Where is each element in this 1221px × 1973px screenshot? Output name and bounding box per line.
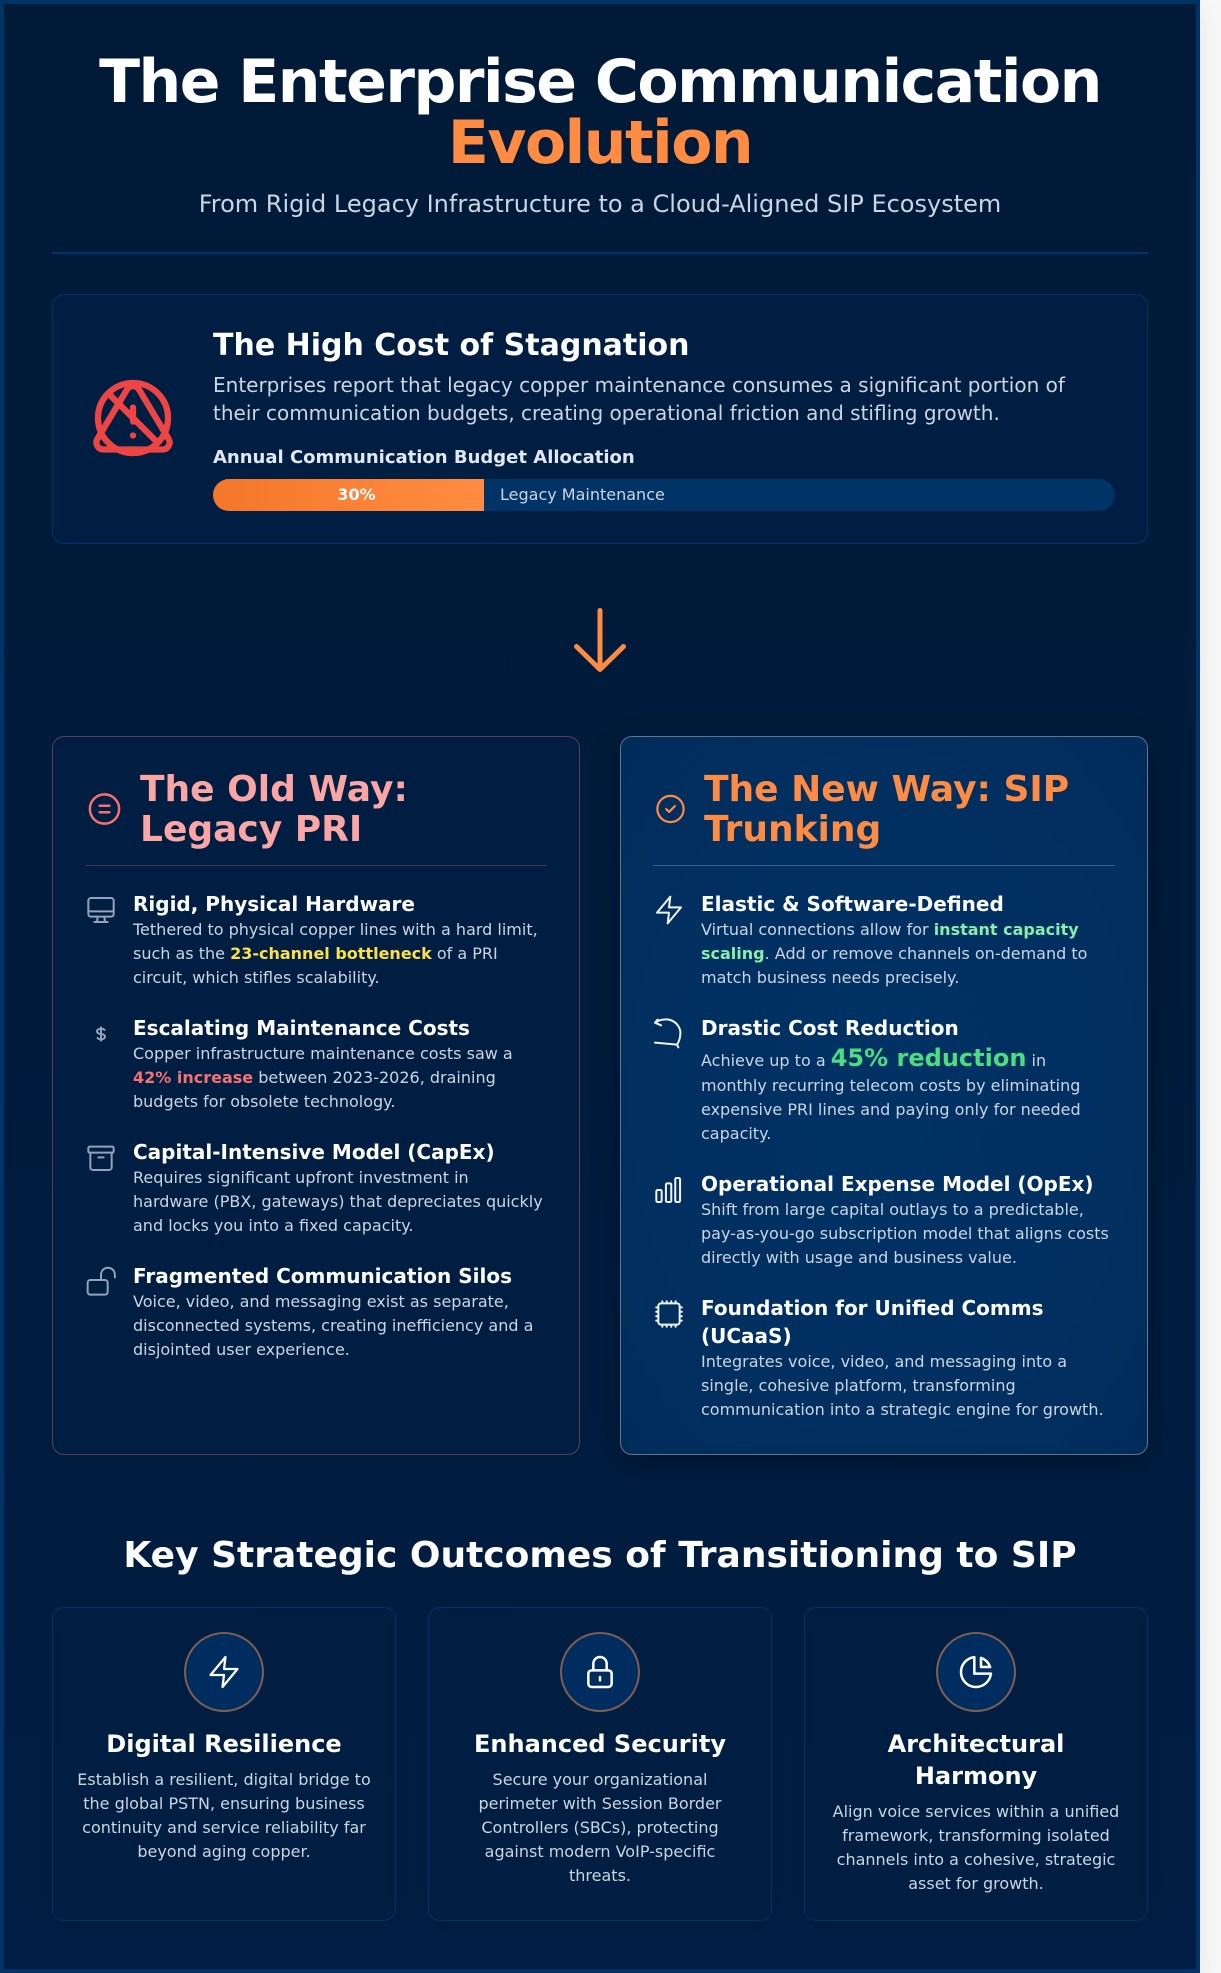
arrow: down to comparison — [574, 608, 626, 672]
icon: dollar sign — [96, 1026, 106, 1042]
item: elastic: Virtual connections allow for instant capacity scaling. Add or remove channels on-demand to match business needs precisely. — [701, 920, 1087, 987]
item: opex — [655, 1172, 1109, 1267]
item: rigid hardware — [87, 892, 538, 987]
outcome title: Digital Resilience — [106, 1730, 342, 1758]
title: Evolution — [448, 108, 752, 178]
panel heading: The New Way: SIP Trunking — [704, 769, 1069, 850]
bar segment: 30 percent: 30% — [337, 485, 376, 504]
outcome text: Align voice services within a unified framework, transforming isolated channels into a cohesive, strategic asset for growth. — [833, 1802, 1119, 1893]
item: ucaas: Integrates voice, video, and messaging into a single, cohesive platform, transforming communication into a strategic engine for growth. — [701, 1352, 1104, 1419]
outcome text: Establish a resilient, digital bridge to the global PSTN, ensuring business continuity and service reliability far beyond aging copper. — [77, 1770, 371, 1861]
item: maintenance costs — [96, 1016, 513, 1111]
icon: bar chart — [655, 1177, 682, 1203]
heading: The High Cost of Stagnation — [213, 328, 690, 363]
icon: circle with lines — [88, 793, 120, 825]
title: The Enterprise Communication — [99, 47, 1101, 117]
item: silos — [86, 1264, 533, 1359]
description: Enterprises report that legacy copper maintenance consumes a significant portion of their communication budgets, creating operational friction and stifling growth. — [213, 373, 1065, 425]
item: capex: Capital-Intensive Model (CapEx) — [133, 1140, 495, 1164]
icon: circular arrow — [654, 1018, 682, 1048]
icon: archive box — [87, 1146, 115, 1171]
item: ucaas — [655, 1296, 1104, 1419]
item: opex: Shift from large capital outlays to a predictable, pay-as-you-go subscription model that aligns costs directly with usage and business value. — [701, 1200, 1109, 1267]
outcome title: Enhanced Security — [474, 1730, 726, 1758]
icon: chip — [655, 1300, 683, 1328]
panel: the high cost of stagnation — [52, 294, 1148, 544]
item: capex: Requires significant upfront investment in hardware (PBX, gateways) that depreciates quickly and locks you into a fixed capacity. — [133, 1168, 543, 1235]
item: rigid hardware: Rigid, Physical Hardware — [133, 892, 415, 916]
panel: the old way — [52, 736, 580, 1455]
item: maintenance costs: Copper infrastructure maintenance costs saw a 42% increase between 2023-2026, draining budgets for obsolete technology. — [133, 1044, 513, 1111]
item: opex: Operational Expense Model (OpEx) — [701, 1172, 1094, 1196]
panel heading: The Old Way: Legacy PRI — [140, 769, 408, 850]
item: rigid hardware: Tethered to physical copper lines with a hard limit, such as the 23-channel bottleneck of a PRI circuit, which stifles scalability. — [133, 920, 538, 987]
icon: padlock badge — [560, 1632, 640, 1712]
item: silos: Fragmented Communication Silos — [133, 1264, 512, 1288]
panel: digital resilience — [52, 1607, 396, 1921]
panel: enhanced security — [428, 1607, 772, 1921]
panel: architectural harmony — [804, 1607, 1148, 1921]
icon: check circle — [656, 794, 685, 824]
bar segment: 30 percent — [213, 479, 484, 511]
item: cost reduction — [654, 1016, 1081, 1143]
icon: warning triangle with prohibition sign — [93, 380, 173, 456]
item: silos: Voice, video, and messaging exist as separate, disconnected systems, creating inefficiency and a disjointed user experience. — [133, 1292, 533, 1359]
outcome title: Architectural Harmony — [888, 1730, 1064, 1790]
icon: open padlock — [86, 1266, 116, 1296]
item: elastic: Elastic & Software-Defined — [701, 892, 1004, 916]
icon: lightning bolt — [656, 896, 682, 924]
bar label: Legacy Maintenance — [500, 485, 665, 504]
item: elastic — [656, 892, 1087, 987]
icon: monitor — [87, 897, 115, 923]
item: cost reduction: Drastic Cost Reduction — [701, 1016, 959, 1040]
item: cost reduction: Achieve up to a 45% reduction in monthly recurring telecom costs by eliminating expensive PRI lines and paying only for needed capacity. — [701, 1044, 1081, 1143]
outcome text: Secure your organizational perimeter with Session Border Controllers (SBCs), protecting against modern VoIP-specific threats. — [478, 1770, 722, 1885]
item: maintenance costs: Escalating Maintenance Costs — [133, 1016, 470, 1040]
budget bar label: Annual Communication Budget Allocation — [213, 447, 635, 468]
panel heading — [653, 769, 1115, 866]
icon: lightning bolt badge — [184, 1632, 264, 1712]
icon: pie chart badge — [936, 1632, 1016, 1712]
budget allocation bar — [213, 479, 1115, 511]
header — [52, 52, 1148, 254]
item: capex — [87, 1140, 543, 1235]
panel heading — [85, 769, 547, 866]
panel: the new way — [620, 736, 1148, 1455]
item: ucaas: Foundation for Unified Comms (UCaaS) — [701, 1296, 1044, 1348]
subtitle: From Rigid Legacy Infrastructure to a Cloud-Aligned SIP Ecosystem — [199, 190, 1001, 218]
title — [99, 47, 1101, 178]
heading: key strategic outcomes: Key Strategic Outcomes of Transitioning to SIP — [123, 1535, 1077, 1576]
